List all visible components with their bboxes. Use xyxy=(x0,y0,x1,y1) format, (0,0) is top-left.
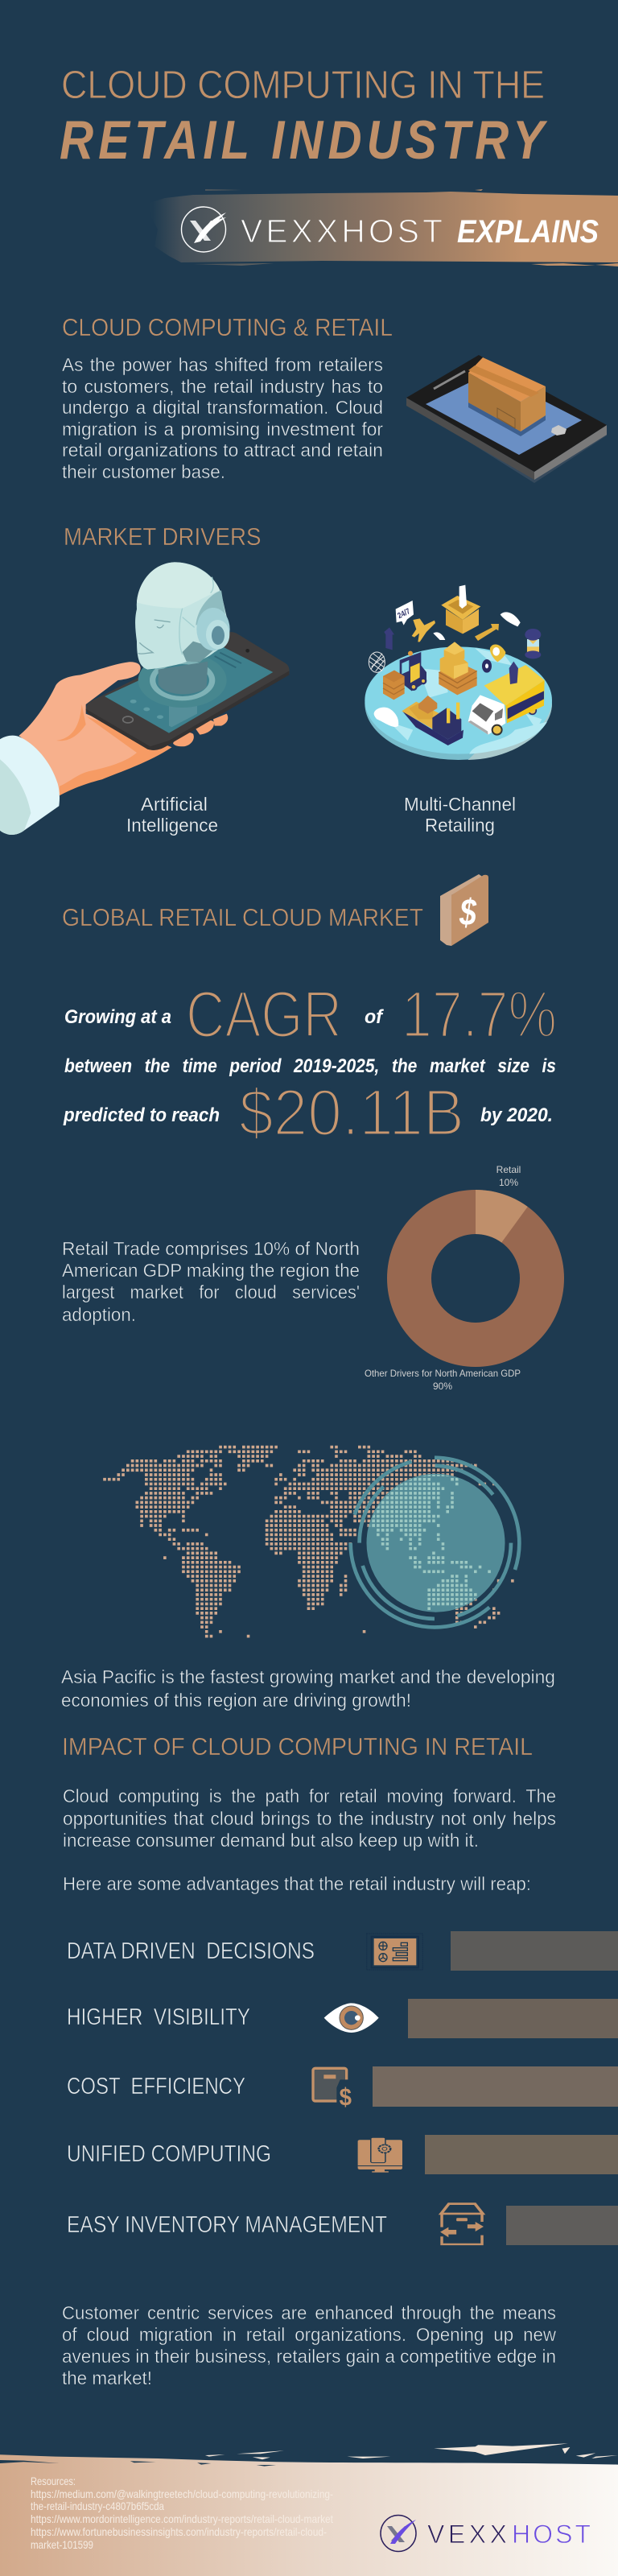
row: easy inventory management xyxy=(67,2204,618,2245)
bar xyxy=(373,2066,618,2107)
row: unified computing xyxy=(67,2135,618,2174)
donut chart: Other Drivers for North American GDP xyxy=(365,1368,521,1379)
text block: intro: their customer base. xyxy=(62,461,225,482)
pins xyxy=(482,644,505,673)
label: multi-channel retailing: Retailing xyxy=(425,815,495,836)
text block: intro xyxy=(62,354,383,482)
banner: Vexxhost explains xyxy=(150,189,618,266)
bubble 24/7 xyxy=(396,601,414,625)
resources: https://www.fortunebusinessinsights.com/industry-reports/retail-cloud- xyxy=(31,2525,327,2538)
row: cost efficiency: COST EFFICIENCY xyxy=(67,2074,245,2099)
ship xyxy=(402,696,464,745)
plane xyxy=(412,618,435,642)
text block: intro: retail organizations to attract and retain xyxy=(62,440,383,460)
arrows xyxy=(384,627,394,650)
text block: closing: Customer centric services are enhanced through the means xyxy=(62,2302,556,2323)
text block: retail trade: adoption. xyxy=(62,1304,136,1325)
text block: retail trade xyxy=(62,1238,360,1325)
row: easy inventory management: EASY INVENTORY MANAGEMENT xyxy=(67,2212,387,2238)
icon: cost box xyxy=(313,2068,352,2111)
stat: CAGR sentence: 17.7% xyxy=(402,978,557,1051)
text block: closing xyxy=(62,2302,556,2388)
title xyxy=(60,63,549,171)
heading: impact: IMPACT OF CLOUD COMPUTING IN RETAIL xyxy=(62,1733,533,1761)
donut chart xyxy=(365,1164,542,1392)
logo mark xyxy=(182,207,226,252)
footer logo: VEXX xyxy=(427,2520,507,2549)
bar xyxy=(451,1931,618,1971)
wire globe xyxy=(369,652,385,672)
row: unified computing: UNIFIED COMPUTING xyxy=(67,2141,271,2167)
dot world map xyxy=(103,1447,519,1637)
text block: intro: As the power has shifted from retailers xyxy=(62,354,383,375)
resources: the-retail-industry-c4807b6f5cda xyxy=(31,2500,164,2512)
icon: dollar tile: $ xyxy=(459,891,476,933)
text block: asia pacific: economies of this region are driving growth! xyxy=(61,1690,411,1711)
sleeve xyxy=(0,736,60,835)
illustration: multi-channel logistics globe xyxy=(365,585,552,760)
title: CLOUD COMPUTING IN THE xyxy=(61,63,545,107)
icon: data dashboard xyxy=(367,1934,422,1970)
heading: cloud computing and retail: CLOUD COMPUTING & RETAIL xyxy=(62,314,393,341)
donut chart: 90% xyxy=(433,1381,452,1392)
icon: inventory box xyxy=(440,2204,484,2244)
text block: closing: the market! xyxy=(62,2368,152,2388)
footer panel xyxy=(0,2443,618,2576)
resources xyxy=(31,2475,333,2551)
text block: intro: undergo a digital transformation. Cloud xyxy=(62,397,383,418)
label: artificial intelligence xyxy=(126,794,218,836)
resources: market-101599 xyxy=(31,2538,93,2551)
resources: Resources: xyxy=(31,2475,76,2487)
footer logo xyxy=(381,2515,591,2552)
text block: asia pacific: Asia Pacific is the fastest growing market and the developing xyxy=(61,1666,555,1687)
stat: CAGR sentence: by 2020. xyxy=(480,1104,553,1126)
icon: eye xyxy=(324,2003,379,2033)
heading: global retail cloud market: GLOBAL RETAIL CLOUD MARKET xyxy=(62,904,423,931)
text block: path forward: Cloud computing is the path for retail moving forward. The xyxy=(63,1785,556,1806)
stat: CAGR sentence: between the time period 2019-2025, the market size is xyxy=(64,1055,556,1077)
text block: path forward: Here are some advantages that the retail industry will reap: xyxy=(63,1873,531,1894)
icon: cost box: $ xyxy=(340,2083,352,2111)
stat: CAGR sentence: of xyxy=(365,1006,384,1028)
row: data driven decisions: DATA DRIVEN DECISIONS xyxy=(67,1938,315,1964)
text block: closing: avenues in their business, retailers gain a competitive edge in xyxy=(62,2346,556,2367)
globe rings xyxy=(351,1458,519,1627)
text block: intro: migration is a promising investment for xyxy=(62,419,383,440)
heading: market drivers: MARKET DRIVERS xyxy=(64,523,261,551)
text block: retail trade: Retail Trade comprises 10% of North xyxy=(62,1238,360,1259)
stacked boxes xyxy=(439,642,477,695)
hourglass xyxy=(525,629,541,658)
stat: CAGR sentence: Growing at a xyxy=(64,1006,171,1028)
globe xyxy=(367,1474,505,1612)
stat: CAGR sentence xyxy=(63,978,557,1150)
text block: path forward: increase consumer demand but also keep up with it. xyxy=(63,1830,479,1851)
stat: CAGR sentence: predicted to reach xyxy=(63,1104,220,1126)
text block: path forward: opportunities that cloud brings to the industry not only helps xyxy=(63,1808,556,1829)
donut chart: 10% xyxy=(499,1177,518,1188)
footer logo: HOST xyxy=(512,2520,591,2549)
banner: Vexxhost explains: VEXXHOST xyxy=(241,213,443,250)
resources: https://www.mordorintelligence.com/industry-reports/retail-cloud-market xyxy=(31,2512,333,2525)
banner: Vexxhost explains: EXPLAINS xyxy=(457,214,599,250)
cloud xyxy=(374,708,398,727)
icon: monitor with phone xyxy=(358,2137,402,2173)
stat: CAGR sentence: CAGR xyxy=(186,978,342,1051)
label: multi-channel retailing xyxy=(404,794,516,836)
label: artificial intelligence: Intelligence xyxy=(126,815,218,836)
row: higher visibility: HIGHER VISIBILITY xyxy=(67,2004,250,2030)
text block: closing: of cloud migration in retail organizations. Opening up new xyxy=(62,2324,556,2345)
truck xyxy=(468,662,545,735)
icon: phone with parcel xyxy=(406,355,607,483)
icon: dollar tile xyxy=(440,874,488,946)
stat: CAGR sentence: $20.11B xyxy=(239,1076,464,1150)
open box xyxy=(441,585,480,634)
text block: intro: to customers, the retail industry has to xyxy=(62,376,383,397)
bar xyxy=(506,2206,618,2245)
text block: retail trade: American GDP making the region the xyxy=(62,1260,360,1281)
forklift xyxy=(383,651,426,700)
row: data driven decisions xyxy=(67,1931,618,1971)
illustration: hand holding phone with AI head xyxy=(0,562,290,835)
row: cost efficiency xyxy=(67,2066,618,2111)
resources: https://medium.com/@walkingtreetech/cloud-computing-revolutionizing- xyxy=(31,2487,333,2500)
label: artificial intelligence: Artificial xyxy=(141,794,208,815)
bar xyxy=(408,1999,618,2038)
text block: path forward xyxy=(63,1785,556,1894)
text block: retail trade: largest market for cloud services' xyxy=(62,1282,360,1302)
bubble 24/7: 24/7 xyxy=(396,607,412,621)
text block: asia pacific xyxy=(61,1666,555,1711)
row: higher visibility xyxy=(67,1999,618,2038)
donut chart: Retail xyxy=(496,1164,521,1175)
label: multi-channel retailing: Multi-Channel xyxy=(404,794,516,815)
title: RETAIL INDUSTRY xyxy=(60,109,549,171)
bar xyxy=(425,2135,618,2174)
